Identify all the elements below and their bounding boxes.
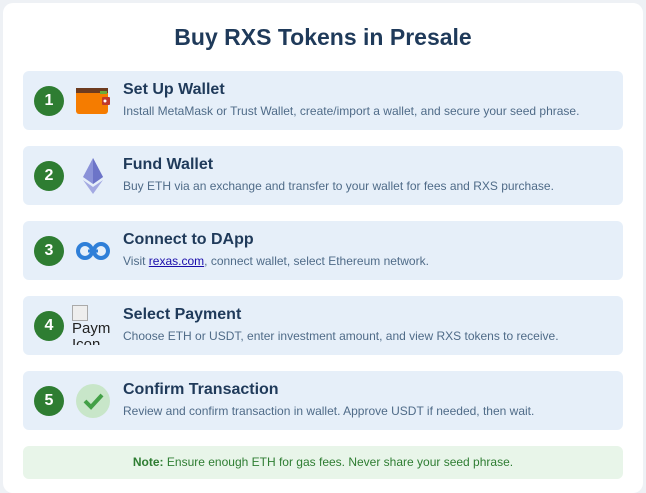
description: Install MetaMask or Trust Wallet, create/import a wallet, and secure your seed phrase. bbox=[123, 104, 579, 118]
number 2 bbox=[34, 161, 64, 191]
icon: broken image: Paym bbox=[72, 320, 110, 337]
panel: step 3 bbox=[23, 221, 623, 280]
number 1: 1 bbox=[45, 92, 53, 109]
description: Review and confirm transaction in wallet. Approve USDT if needed, then wait. bbox=[123, 404, 534, 418]
heading: Confirm Transaction bbox=[123, 381, 279, 398]
note: Note: Ensure enough ETH for gas fees. Never share your seed phrase. bbox=[133, 455, 513, 469]
description: Choose ETH or USDT, enter investment amount, and view RXS tokens to receive. bbox=[123, 329, 559, 343]
title: Buy RXS Tokens in Presale bbox=[174, 24, 472, 50]
panel: step 4 bbox=[23, 296, 623, 355]
panel: step 2 bbox=[23, 146, 623, 205]
number 3: 3 bbox=[45, 242, 53, 259]
number 3 bbox=[34, 236, 64, 266]
number 4: 4 bbox=[45, 317, 53, 334]
icon: check bbox=[76, 384, 110, 418]
panel: step 5 bbox=[23, 371, 623, 430]
heading: Connect to DApp bbox=[123, 231, 254, 248]
number 4 bbox=[34, 311, 64, 341]
icon: ethereum bbox=[83, 158, 103, 194]
description: Buy ETH via an exchange and transfer to your wallet for fees and RXS purchase. bbox=[123, 179, 554, 193]
number 1 bbox=[34, 86, 64, 116]
heading: Set Up Wallet bbox=[123, 81, 225, 98]
description: Visit rexas.com, connect wallet, select Ethereum network. bbox=[123, 254, 429, 268]
heading: Fund Wallet bbox=[123, 156, 213, 173]
panel: step 1 bbox=[23, 71, 623, 130]
icon: wallet bbox=[76, 88, 110, 114]
note bbox=[23, 446, 623, 479]
number 5 bbox=[34, 386, 64, 416]
number 2: 2 bbox=[45, 167, 53, 184]
icon: link bbox=[76, 242, 110, 260]
heading: Select Payment bbox=[123, 306, 241, 323]
icon: broken image bbox=[72, 305, 110, 345]
number 5: 5 bbox=[45, 392, 53, 409]
